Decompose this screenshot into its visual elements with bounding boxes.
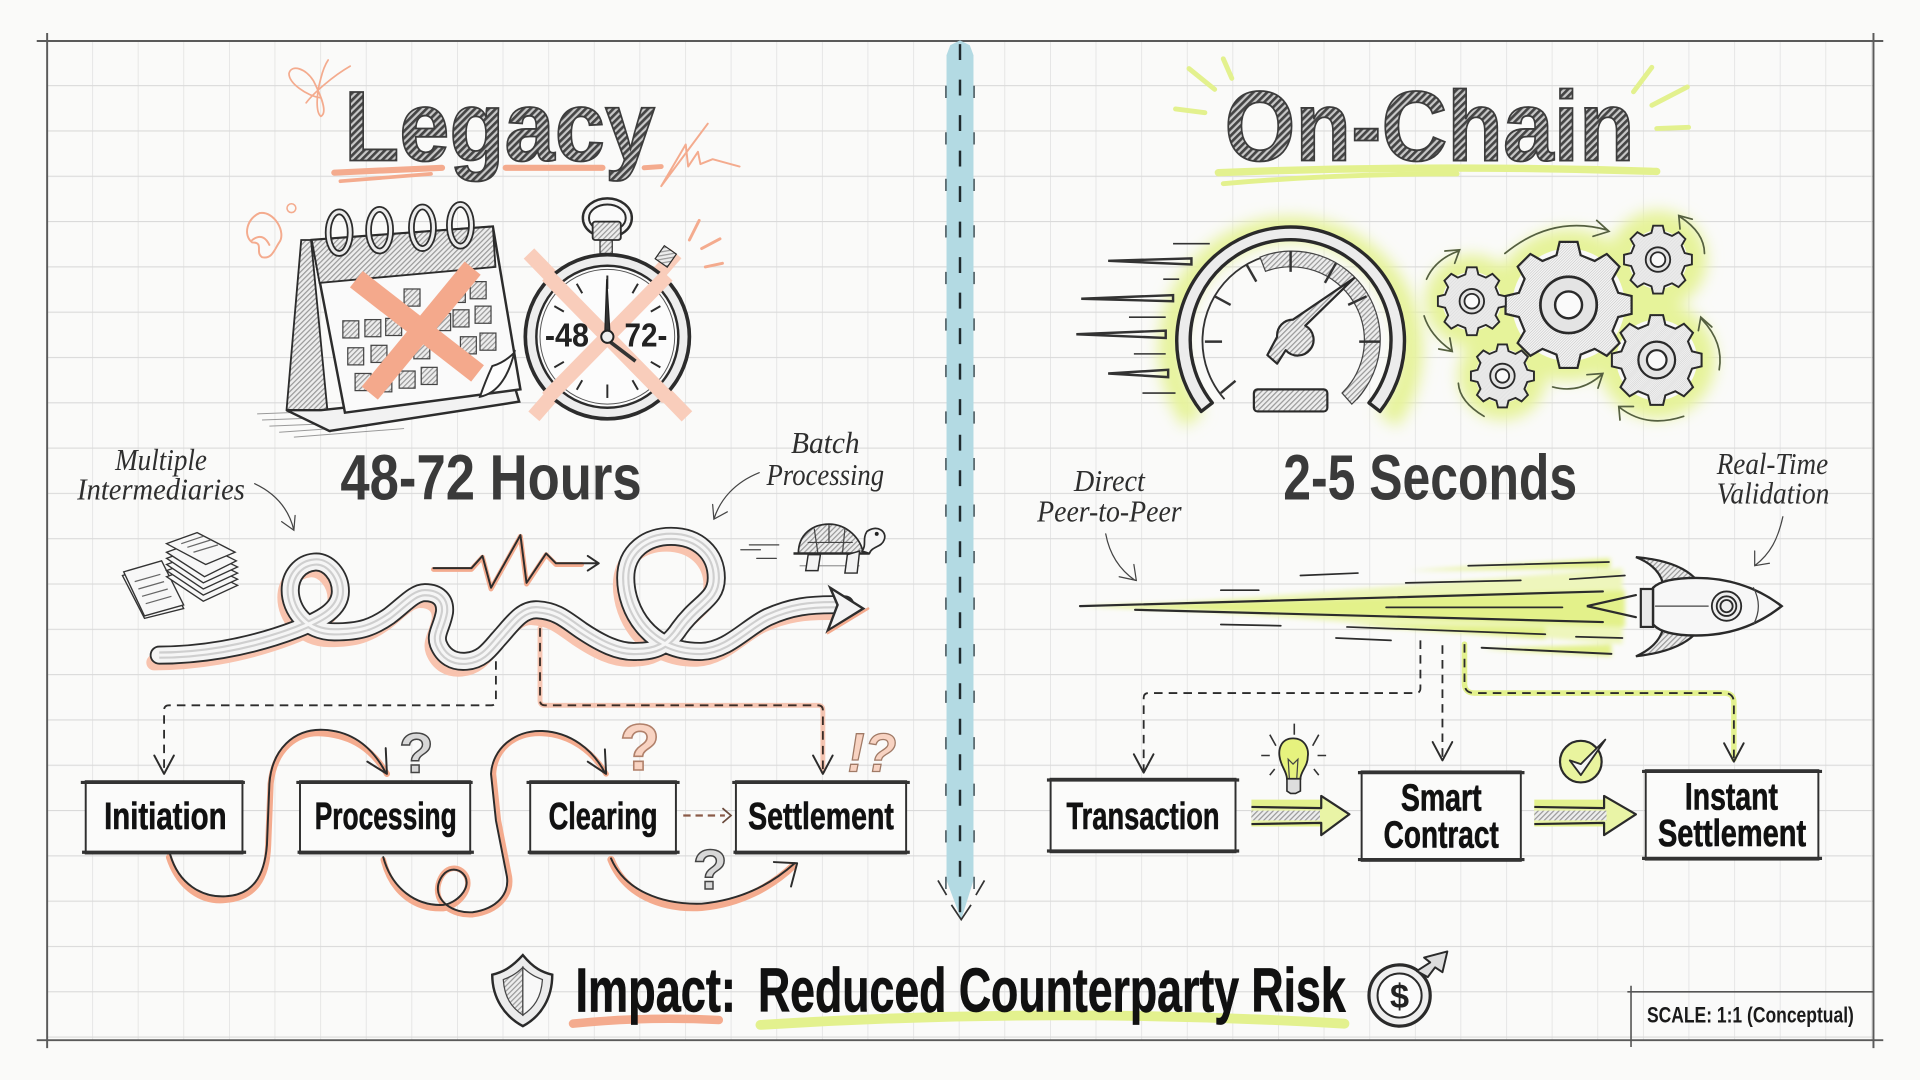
icon: turtle <box>741 524 885 573</box>
annotation: Batch Processing: Processing <box>766 458 884 492</box>
rocket fins <box>1636 557 1695 583</box>
underline: Reduced Counterparty Risk <box>760 1015 1344 1025</box>
gauge readout <box>1254 389 1327 411</box>
impact banner <box>492 951 1447 1026</box>
arrow: looping Processing to Clearing <box>383 731 606 915</box>
arrow: Clearing to Settlement curve <box>611 858 797 908</box>
icon: speedometer <box>1076 227 1411 420</box>
title underline: on-chain <box>1218 168 1657 184</box>
rays around heading <box>1176 59 1689 129</box>
burst marks <box>689 220 722 267</box>
orange X behind dial <box>529 253 687 416</box>
process box: Smart Contract <box>1358 771 1524 861</box>
arrow: wandering Initiation to Processing <box>169 730 387 900</box>
annotation: Direct Peer-to-Peer: Direct <box>1073 464 1146 498</box>
dashed connector to Initiation <box>154 661 496 774</box>
annotation: Real-Time Validation: Validation <box>1717 476 1829 510</box>
icon: stopwatch crossed out <box>525 198 722 419</box>
process box: Instant Settlement <box>1642 770 1822 860</box>
dial label 72: 72- <box>624 318 667 355</box>
scale note: SCALE: 1:1 (Conceptual) <box>1647 1002 1854 1027</box>
process box: Processing <box>296 781 474 853</box>
rocket body <box>1653 578 1782 636</box>
annotation: Direct Peer-to-Peer <box>1036 464 1182 580</box>
gauge hatched band <box>1260 251 1380 404</box>
process box: Initiation: Initiation <box>104 796 227 838</box>
underline: Impact <box>573 1019 719 1024</box>
process box: Clearing <box>527 781 680 853</box>
question mark: gray bottom: ? <box>693 838 727 901</box>
calendar rings <box>328 204 471 253</box>
icon: coin with growth arrow <box>1369 951 1447 1026</box>
exclamation question marks: !? <box>847 721 896 783</box>
icon: paper stack <box>122 533 238 618</box>
dial label 48: -48 <box>545 318 589 355</box>
icon: check badge <box>1560 740 1605 782</box>
doodle: thought scribble <box>247 204 296 258</box>
panel: on-chain <box>1036 59 1829 861</box>
icon: coin with growth arrow: $ <box>1390 978 1409 1016</box>
icon: calendar crossed out <box>257 204 520 437</box>
calendar day cells <box>343 282 496 392</box>
annotation: Batch Processing: Batch <box>791 426 860 460</box>
gauge rim <box>1177 227 1404 411</box>
process box: Clearing: Clearing <box>549 796 658 838</box>
process box: Smart Contract: Contract <box>1384 814 1499 856</box>
annotation: Multiple Intermediaries <box>76 443 295 530</box>
dial ticks <box>554 276 660 398</box>
gauge lime glow <box>1171 229 1411 420</box>
arrow: Transaction to Smart Contract <box>1251 796 1349 835</box>
scale note <box>1627 986 1873 1047</box>
icon: light bulb <box>1261 724 1326 793</box>
exhaust lime <box>1080 558 1625 656</box>
doodle: butterfly scribble <box>289 60 350 116</box>
stopwatch hands <box>601 279 636 361</box>
annotation: Real-Time Validation <box>1716 447 1829 566</box>
exhaust lines <box>1080 562 1636 654</box>
gauge ticks <box>1205 251 1380 393</box>
rocket window <box>1712 591 1741 621</box>
squiggly legacy ribbon arrow <box>154 536 868 669</box>
process box: Instant Settlement: Settlement <box>1658 813 1806 855</box>
annotation: Multiple Intermediaries: Multiple <box>114 443 207 477</box>
process box: Settlement <box>732 781 910 853</box>
title underline: legacy <box>334 124 740 186</box>
lower-right gear <box>1612 315 1702 405</box>
icon: gears <box>1424 211 1720 421</box>
dashed connector to Transaction <box>1134 640 1420 773</box>
rocket nozzle <box>1641 589 1653 627</box>
rotation arrows <box>1424 216 1720 421</box>
dashed arrow: Clearing to Settlement <box>683 808 731 823</box>
page curl <box>480 353 514 397</box>
question mark: orange: ? <box>620 711 660 785</box>
center divider arrow <box>938 40 984 920</box>
gauge needle <box>1267 278 1354 364</box>
annotation: Real-Time Validation: Real-Time <box>1716 447 1828 481</box>
panel: legacy <box>76 60 910 915</box>
process box: Processing: Processing <box>315 796 457 838</box>
dashed connector to Smart Contract <box>1433 645 1452 760</box>
left gear <box>1438 267 1506 335</box>
question mark: gray top: ? <box>399 722 434 785</box>
annotation: Multiple Intermediaries: Intermediaries <box>76 473 245 507</box>
process box: Instant Settlement: Instant <box>1685 776 1778 818</box>
lower-left gear <box>1471 344 1534 407</box>
text: Reduced Counterparty Risk: Reduced Counterparty Risk <box>758 955 1346 1025</box>
arrow: Smart Contract to Instant Settlement <box>1534 796 1636 835</box>
gear lime glow <box>1425 211 1716 420</box>
icon: shield <box>492 955 552 1026</box>
orange X across dial <box>547 276 667 398</box>
heading: Legacy: Legacy <box>344 71 655 182</box>
annotation: Batch Processing <box>713 426 884 519</box>
orange X over calendar <box>356 268 478 393</box>
process box: Transaction: Transaction <box>1067 796 1220 838</box>
stat: 2-5 Seconds: 2-5 Seconds <box>1283 443 1577 514</box>
process box: Transaction <box>1047 779 1239 852</box>
icon: rocket with exhaust trail <box>1080 557 1782 656</box>
text: Impact: Impact: <box>576 955 736 1025</box>
annotation: Direct Peer-to-Peer: Peer-to-Peer <box>1036 495 1182 529</box>
speed lines <box>1076 244 1210 393</box>
process box: Smart Contract: Smart <box>1401 778 1482 820</box>
stat: 48-72 Hours: 48-72 Hours <box>340 443 642 514</box>
process box: Settlement: Settlement <box>748 796 894 838</box>
heading: On-Chain: On-Chain <box>1224 71 1635 182</box>
upper-right gear <box>1624 226 1692 294</box>
dashed connector to Instant Settlement <box>1464 644 1744 762</box>
icon: pulse arrow <box>433 535 599 589</box>
dashed connector to Settlement <box>540 628 833 774</box>
process box: Initiation <box>81 781 246 853</box>
big gear <box>1506 242 1632 368</box>
